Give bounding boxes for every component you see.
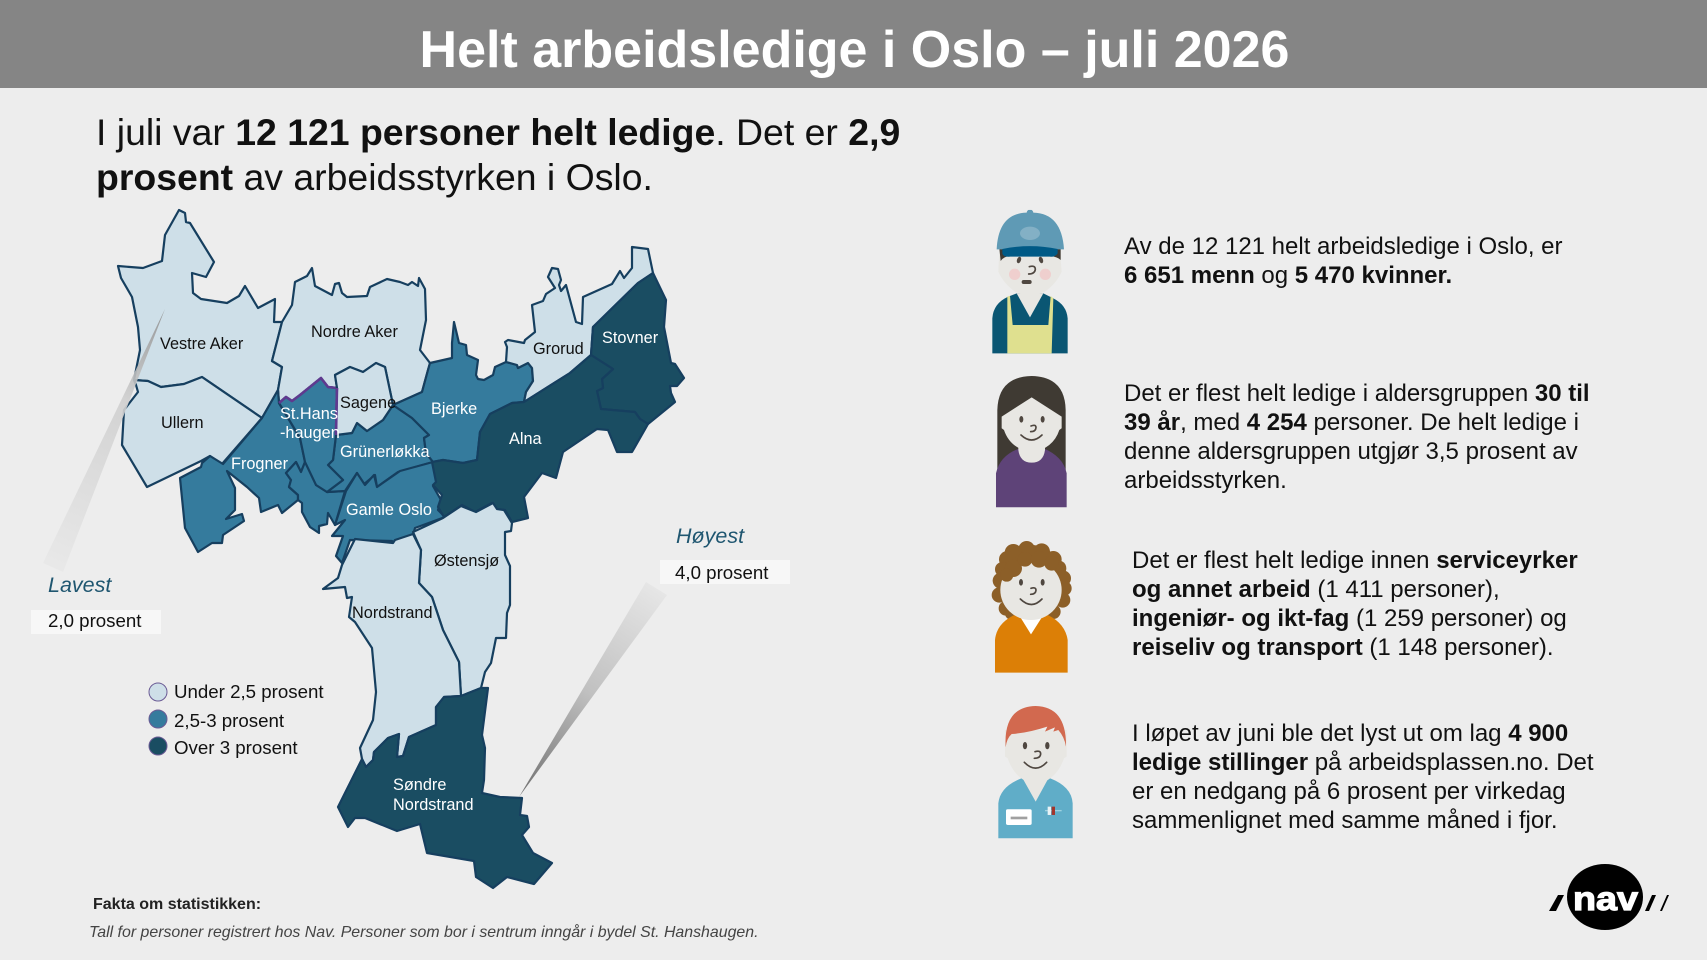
- icon: woman with long dark hair: [996, 376, 1067, 507]
- map district labels: Ullern: [161, 414, 204, 432]
- pointer: highest value: [519, 582, 667, 797]
- district: St. Hanshaugen: [279, 378, 343, 492]
- text: vacancies: sammenlignet med samme måned i fjor.: [1132, 807, 1558, 834]
- map district labels: Nordstrand: [352, 604, 433, 622]
- district: Ullern: [122, 377, 262, 487]
- map of Oslo districts: [118, 210, 684, 888]
- district: Nordstrand: [323, 534, 461, 767]
- callout: lowest: 2,0 prosent: [48, 610, 142, 631]
- map district labels: Østensjø: [434, 552, 499, 570]
- map district labels: Søndre: [393, 776, 446, 794]
- map district labels: Vestre Aker: [160, 335, 244, 353]
- text: age group: denne aldersgruppen utgjør 3,5 prosent av: [1124, 438, 1578, 465]
- text: occupations: Det er flest helt ledige innen serviceyrker: [1132, 547, 1578, 574]
- text: occupations: og annet arbeid (1 411 personer),: [1132, 576, 1500, 603]
- map district labels: Nordstrand: [393, 796, 474, 814]
- text: vacancies: ledige stillinger på arbeidsplassen.no. Det: [1132, 749, 1594, 776]
- logo: Nav: [1549, 864, 1669, 930]
- text: gender split: [1124, 233, 1563, 289]
- legend: 2,5-3 prosent: [174, 710, 285, 731]
- district: Søndre Nordstrand: [338, 688, 552, 888]
- district: Bjerke: [393, 322, 533, 463]
- icon: worker man with cap: [992, 210, 1068, 353]
- text: occupations: [1132, 547, 1578, 661]
- map district labels: Nordre Aker: [311, 323, 398, 341]
- map district labels: Bjerke: [431, 400, 477, 418]
- district: Gamle Oslo: [332, 462, 445, 563]
- map district labels: Gamle Oslo: [346, 501, 432, 519]
- callout: highest: Høyest: [676, 524, 745, 548]
- footnote: Fakta om statistikken:: [93, 896, 261, 913]
- icon: woman with curly hair: [992, 541, 1072, 673]
- callout: lowest: [31, 573, 161, 634]
- text: vacancies: I løpet av juni ble det lyst ut om lag 4 900: [1132, 720, 1568, 747]
- district: Alna: [432, 355, 648, 522]
- text: gender split: 6 651 menn og 5 470 kvinner.: [1124, 262, 1452, 289]
- map district labels: Sagene: [340, 394, 396, 412]
- district: Østensjø: [413, 503, 512, 696]
- map district labels: Stovner: [602, 329, 659, 347]
- headline text: [96, 111, 900, 198]
- map district labels: Alna: [509, 430, 543, 448]
- icon: man in blue scrubs: [998, 706, 1073, 838]
- district: Nordre Aker: [272, 268, 430, 405]
- header band with title: [0, 0, 1707, 88]
- map district labels: Grorud: [533, 340, 584, 358]
- district: Frogner: [180, 390, 305, 552]
- map district labels: -haugen: [280, 424, 340, 442]
- pointer: lowest value: [43, 309, 165, 572]
- district: Vestre Aker: [118, 210, 282, 418]
- text: age group: 39 år, med 4 254 personer. De helt ledige i: [1124, 409, 1579, 436]
- headline text: I juli var 12 121 personer helt ledige. Det er 2,9: [96, 111, 900, 153]
- header band with title: Helt arbeidsledige i Oslo – juli 2026: [420, 21, 1289, 79]
- district: Grorud: [505, 247, 653, 402]
- callout: highest: [660, 524, 790, 584]
- text: vacancies: [1132, 720, 1594, 834]
- text: age group: arbeidsstyrken.: [1124, 467, 1287, 494]
- text: vacancies: er en nedgang på 6 prosent per virkedag: [1132, 778, 1566, 805]
- footnote: [89, 896, 758, 941]
- text: age group: [1124, 380, 1590, 494]
- callout: highest: 4,0 prosent: [675, 562, 769, 583]
- district: Sentrum area: [286, 462, 345, 533]
- legend: [149, 681, 324, 758]
- text: occupations: ingeniør- og ikt-fag (1 259 personer) og: [1132, 605, 1567, 632]
- district: Sagene: [335, 363, 393, 435]
- district: Stovner: [591, 273, 684, 424]
- legend: Over 3 prosent: [174, 737, 298, 758]
- text: age group: Det er flest helt ledige i aldersgruppen 30 til: [1124, 380, 1590, 407]
- district: Grünerløkka: [327, 405, 433, 492]
- callout: lowest: Lavest: [48, 573, 112, 597]
- text: occupations: reiseliv og transport (1 148 personer).: [1132, 634, 1554, 661]
- footnote: Tall for personer registrert hos Nav. Personer som bor i sentrum inngår i bydel St. Hanshaugen.: [89, 923, 758, 941]
- map district labels: Frogner: [231, 455, 289, 473]
- map district labels: Grünerløkka: [340, 443, 431, 461]
- text: gender split: Av de 12 121 helt arbeidsledige i Oslo, er: [1124, 233, 1563, 260]
- headline text: prosent av arbeidsstyrken i Oslo.: [96, 156, 653, 198]
- legend: Under 2,5 prosent: [174, 681, 324, 702]
- map district labels: St.Hans: [280, 405, 338, 423]
- map district labels: [160, 323, 659, 814]
- logo: Nav: nav: [1573, 880, 1639, 917]
